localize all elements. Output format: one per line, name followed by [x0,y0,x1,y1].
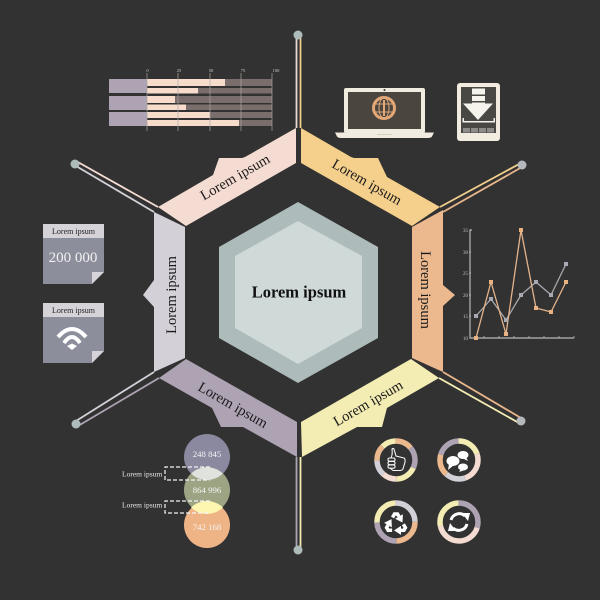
panel: yellow segment [301,359,439,457]
bar chart: 100 [273,68,280,73]
line chart: 35 [463,229,468,234]
line chart: 30 [463,251,468,256]
line chart: 20 [463,294,468,299]
callout labels [122,470,162,510]
venn circles: 864 996 [193,485,222,495]
icon ring: thumbs up [377,441,415,479]
icon ring: chat [440,441,478,479]
bar chart [109,68,280,131]
card: wifi: Lorem ipsum [52,306,96,315]
label: lilac segment: Lorem ipsum [164,255,180,334]
bar chart: 0 [146,68,149,73]
card: 200 000: 200 000 [49,250,97,266]
icon: tablet download [457,83,500,141]
line chart: 10 [463,337,468,342]
panel: lilac segment [143,212,185,372]
icon ring: refresh [440,503,478,541]
dashed callouts [165,467,210,513]
icon: refresh arrows [448,513,470,531]
label: yellow segment: Lorem ipsum [331,377,407,430]
spoke: upper left [70,160,158,212]
panel: orange segment [301,128,440,226]
spoke: top [294,30,302,128]
central hexagon [219,202,378,383]
bar chart: 25 [177,68,182,73]
venn circles: 248 845 [193,449,222,459]
panel: pink segment [158,128,296,226]
icon: wifi [58,329,86,350]
card: wifi [43,303,104,363]
label: peach segment: Lorem ipsum [417,251,433,330]
icon: recycle symbol [384,514,406,535]
label: purple segment: Lorem ipsum [195,379,271,432]
card: 200 000 [43,224,104,284]
card: 200 000: Lorem ipsum [52,227,96,236]
line chart: 15 [463,315,468,320]
panel: purple segment [159,359,297,457]
spoke: upper right [440,160,526,212]
central heading: Lorem ipsum [252,282,347,301]
spoke: lower left [72,372,159,428]
bar chart: 50 [209,68,214,73]
venn circles [122,434,230,548]
icon ring: recycle [377,503,415,541]
label: orange segment: Lorem ipsum [329,156,405,209]
panel: peach segment [412,210,455,372]
line chart [463,228,574,342]
icon: speech bubbles [446,451,468,472]
venn circles: 742 168 [193,522,222,532]
icon: thumb [388,448,405,470]
bar chart: 75 [241,68,246,73]
line chart: 25 [463,272,468,277]
callout labels: Lorem ipsum [122,470,162,478]
spoke: lower right [439,372,526,426]
icon: globe [374,98,394,118]
icon: laptop [335,88,434,138]
callout labels: Lorem ipsum [122,500,162,510]
label: pink segment: Lorem ipsum [198,151,274,204]
spoke: bottom [294,457,302,554]
